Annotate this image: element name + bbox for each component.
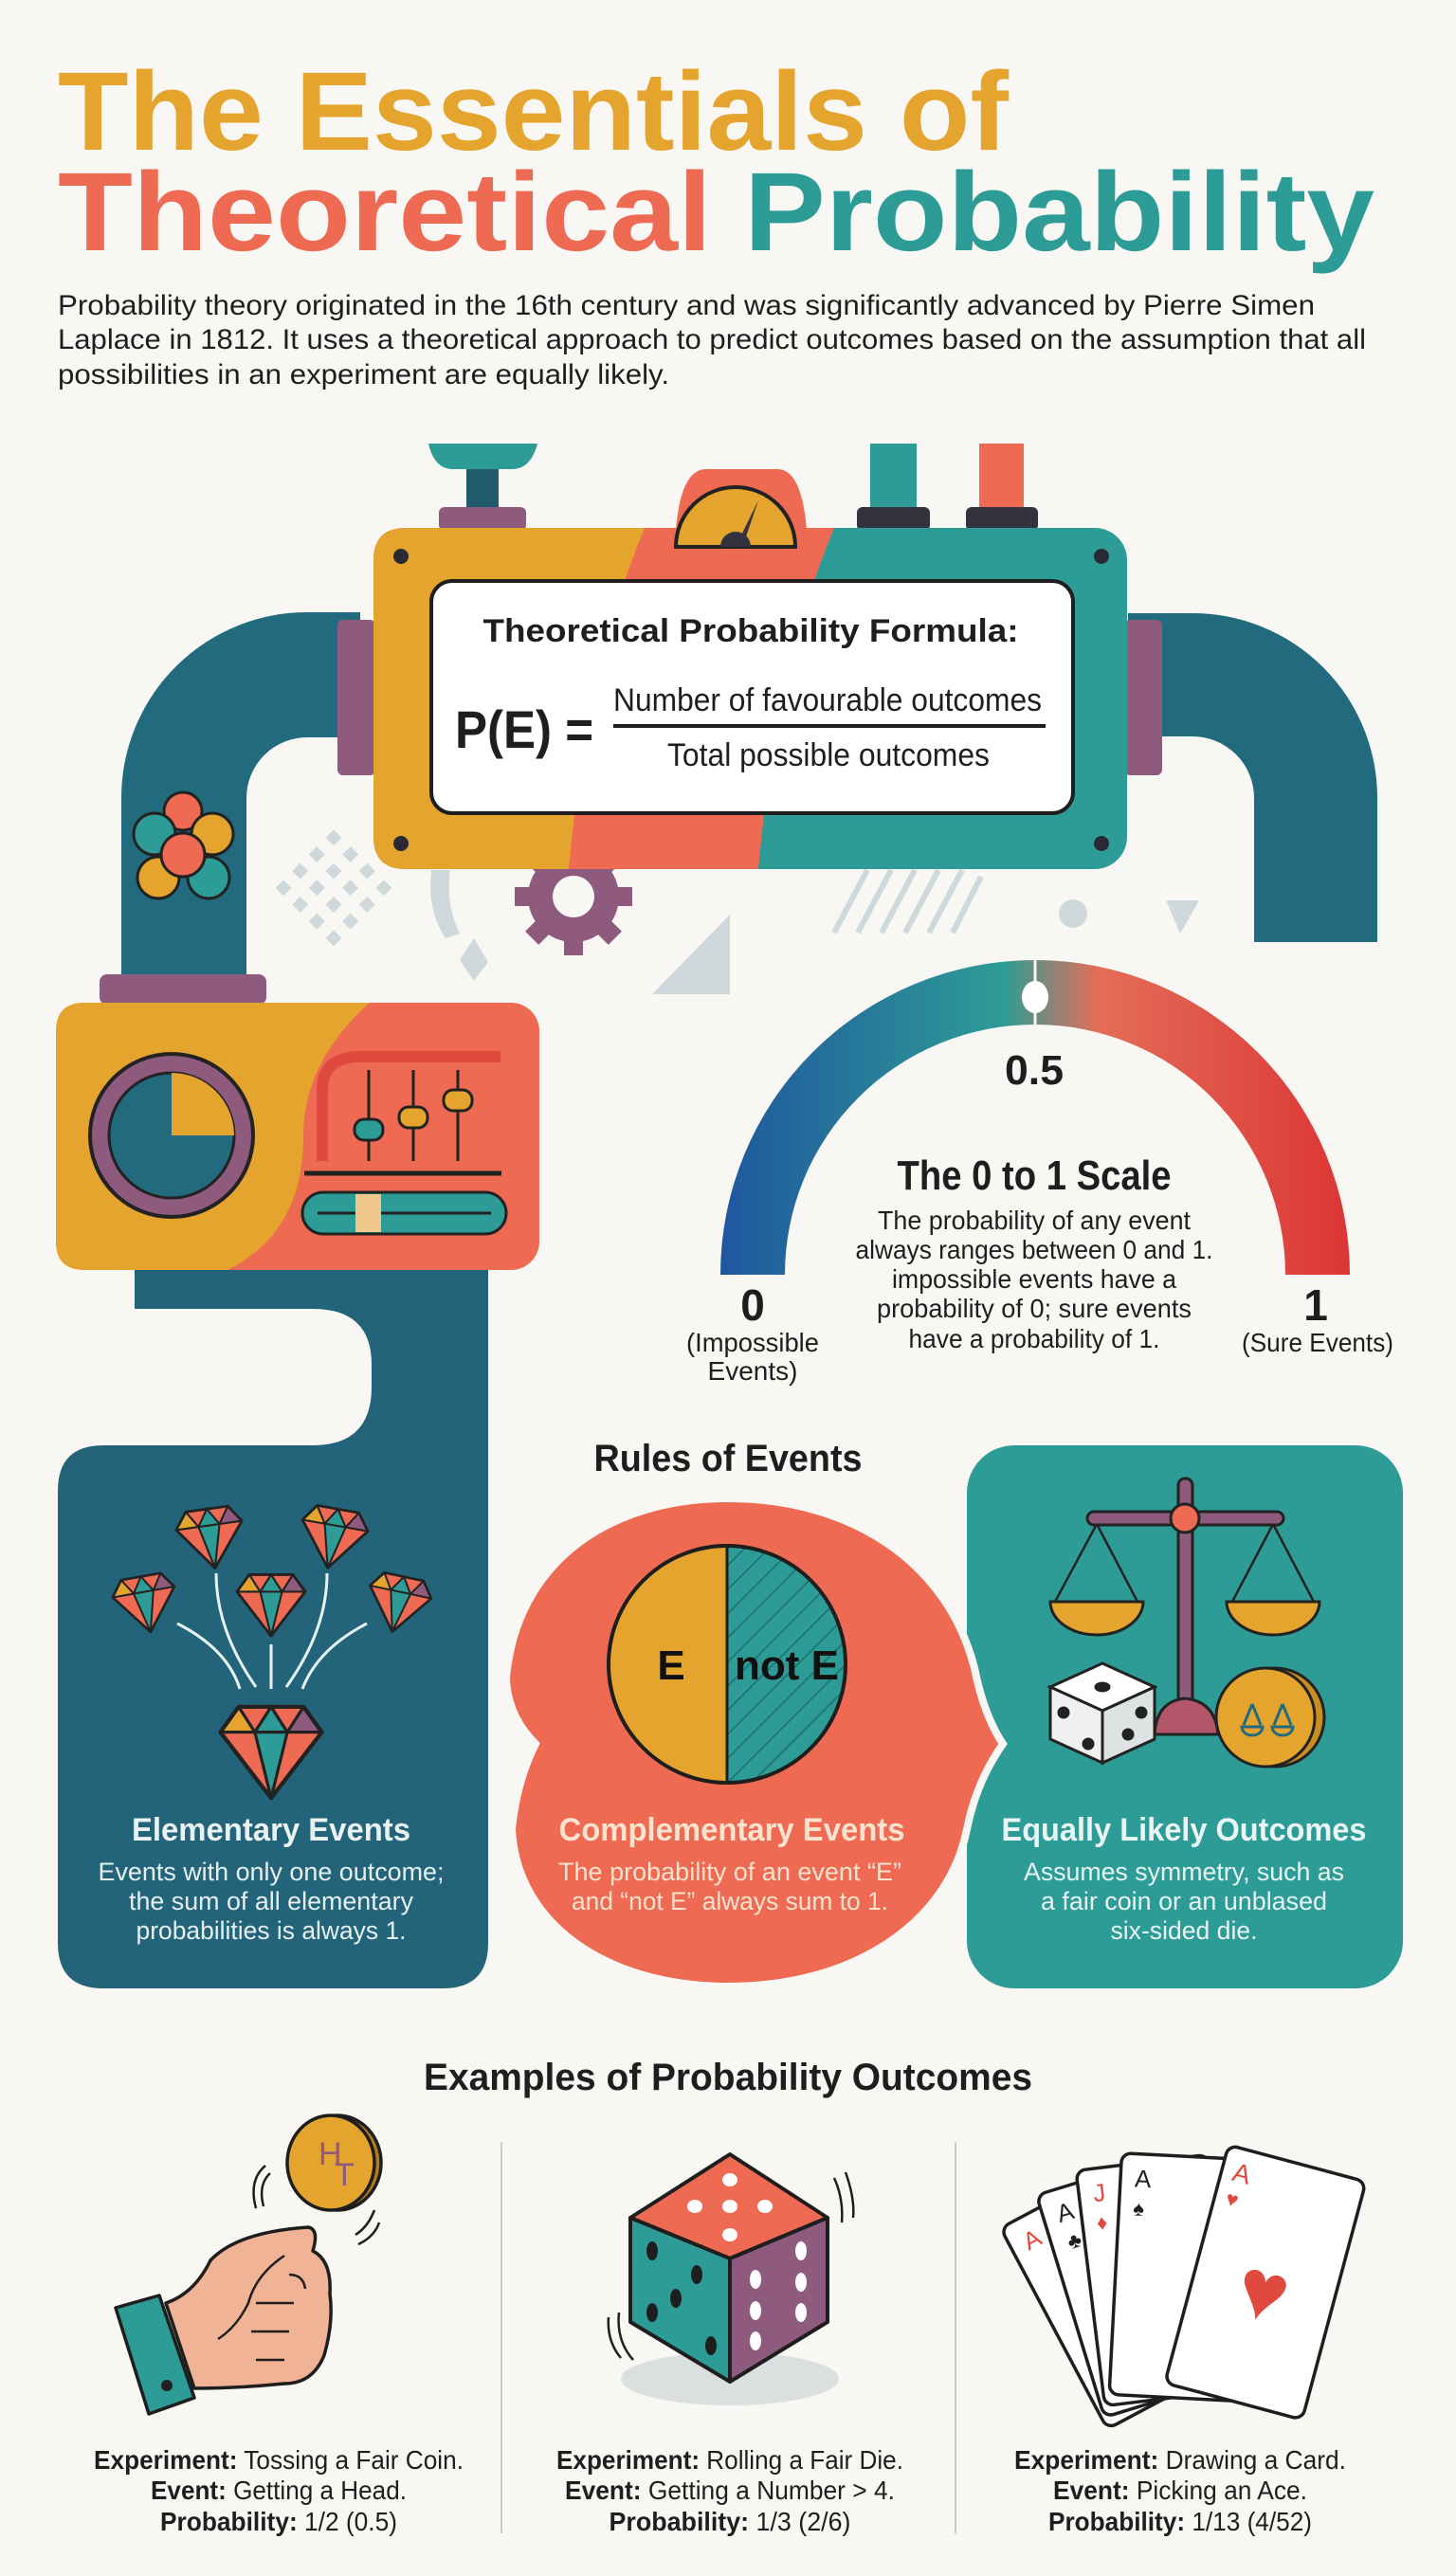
control panel (56, 1003, 539, 1270)
gauge: 0 to 1 scale: The 0 to 1 Scale (897, 1152, 1172, 1199)
intro paragraph: Laplace in 1812. It uses a theoretical approach to predict outcomes based on the assumption that all (58, 324, 1366, 355)
icon: card fan: ♠ (1133, 2196, 1145, 2221)
example: coin toss: Experiment: Tossing a Fair Coin. (94, 2445, 464, 2475)
icon: coin and hand: H (318, 2136, 342, 2172)
icon: E / not E circle (609, 1546, 846, 1783)
example: drawing a card: Probability: 1/13 (4/52) (1048, 2507, 1312, 2536)
icon: rolling die (609, 2154, 853, 2405)
icon: E / not E circle: not E (735, 1642, 839, 1689)
gauge: 0 to 1 scale: (Sure Events) (1242, 1328, 1393, 1357)
title: Probability (744, 150, 1374, 275)
panel: equally likely outcomes (967, 1445, 1403, 1988)
icon: molecule cluster (134, 792, 233, 898)
panel: complementary events: and “not E” always sum to 1. (572, 1887, 888, 1915)
example: die roll (556, 2154, 903, 2536)
example: drawing a card: Event: Picking an Ace. (1053, 2476, 1307, 2505)
panel: equally likely outcomes: a fair coin or an unblased (1041, 1887, 1327, 1915)
formula machine (337, 444, 1162, 869)
elementary events content: probabilities is always 1. (136, 1916, 406, 1945)
icon: card fan (1001, 2145, 1366, 2429)
intro paragraph: possibilities in an experiment are equally likely. (58, 359, 669, 390)
intro paragraph (58, 290, 1366, 390)
machine body (373, 469, 1127, 869)
gauge: 0 to 1 scale: The probability of any event (878, 1206, 1191, 1235)
title (58, 49, 1374, 275)
example: drawing a card (1001, 2145, 1366, 2536)
example: die roll: Probability: 1/3 (2/6) (609, 2507, 851, 2536)
example: die roll: Experiment: Rolling a Fair Die. (556, 2445, 903, 2475)
panel: equally likely outcomes: Assumes symmetry, such as (1024, 1858, 1344, 1886)
formula box (431, 581, 1073, 813)
intro paragraph: Probability theory originated in the 16th century and was significantly advanced by Pierre Simen (58, 290, 1315, 321)
icon: card fan: J (1091, 2178, 1107, 2207)
panel: complementary events: The probability of an event “E” (558, 1858, 901, 1886)
icon: card fan: A (1018, 2222, 1046, 2256)
formula box: Theoretical Probability Formula: (483, 613, 1018, 649)
top pipes (857, 444, 1038, 531)
icon: gold coin (1216, 1668, 1324, 1767)
icon: card fan: ♦ (1095, 2210, 1109, 2235)
example: drawing a card: Experiment: Drawing a Card. (1014, 2445, 1346, 2475)
gauge: 0 to 1 scale: always ranges between 0 and 1. (855, 1235, 1213, 1264)
formula box: Total possible outcomes (667, 737, 990, 773)
panel: equally likely outcomes: six-sided die. (1111, 1916, 1257, 1945)
formula box: P(E) = (455, 699, 593, 759)
icon: card fan: A (1053, 2196, 1078, 2228)
pipe connector purple (100, 974, 266, 1005)
gauge: 0 to 1 scale: probability of 0; sure events (877, 1294, 1192, 1323)
title: Theoretical (58, 150, 712, 275)
pipe: left (184, 675, 360, 986)
icon: balance scale (1050, 1478, 1320, 1734)
icon: sliders (302, 1057, 506, 1234)
icon: gear (515, 838, 632, 955)
icon: coin and hand: T (335, 2157, 355, 2193)
icon: coin and hand (116, 2115, 381, 2414)
formula box: Number of favourable outcomes (613, 682, 1042, 718)
icon: white die (1050, 1663, 1155, 1763)
valve (428, 444, 537, 531)
gauge: 0 to 1 scale: 0.5 (1005, 1047, 1064, 1094)
gauge: 0 to 1 scale: (Impossible (686, 1328, 819, 1357)
panel: equally likely outcomes: Equally Likely Outcomes (1001, 1812, 1367, 1848)
gauge: 0 to 1 scale: impossible events have a (892, 1264, 1176, 1294)
side connectors (337, 620, 375, 775)
icon: gems (110, 1503, 434, 1798)
example: die roll: Event: Getting a Number > 4. (565, 2476, 895, 2505)
icon: card fan: ♣ (1065, 2227, 1084, 2254)
example: coin toss (94, 2115, 464, 2536)
gauge: 0 to 1 scale (686, 960, 1393, 1386)
gauge: 0 to 1 scale: Events) (708, 1356, 797, 1386)
gauge: 0 to 1 scale: 0 (740, 1280, 765, 1330)
example: coin toss: Probability: 1/2 (0.5) (160, 2507, 397, 2536)
heading: rules of events: Rules of Events (593, 1438, 863, 1479)
panel: elementary events (pipe body) (58, 1268, 488, 1988)
title: The Essentials of (58, 49, 1010, 174)
elementary events content: Elementary Events (132, 1812, 410, 1848)
elementary events content (99, 1503, 444, 1945)
icon: card fan: A (1134, 2164, 1153, 2193)
pipe: right (1128, 675, 1316, 942)
example: coin toss: Event: Getting a Head. (151, 2476, 407, 2505)
gauge dial (676, 487, 795, 547)
panel: complementary events (506, 1498, 1003, 1986)
icon: card fan: A (1229, 2157, 1254, 2190)
elementary events content: the sum of all elementary (129, 1887, 413, 1915)
gauge: 0 to 1 scale: 1 (1303, 1280, 1328, 1330)
icon: ring dial (90, 1054, 253, 1217)
heading: examples: Examples of Probability Outcomes (424, 2057, 1032, 2098)
icon: card fan: ♥ (1227, 2240, 1300, 2344)
decorative shapes (275, 829, 1199, 994)
elementary events content: Events with only one outcome; (99, 1858, 444, 1886)
icon: E / not E circle: E (657, 1642, 685, 1689)
gauge: 0 to 1 scale: have a probability of 1. (908, 1324, 1160, 1353)
panel: complementary events: Complementary Events (559, 1812, 904, 1848)
icon: card fan: ♥ (1223, 2186, 1241, 2212)
